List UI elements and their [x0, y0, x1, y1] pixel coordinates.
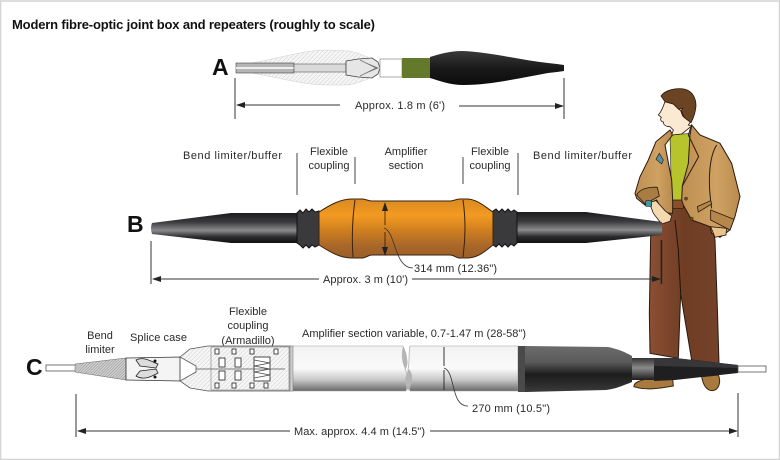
- B section labels: Amplifier: [385, 146, 428, 158]
- man: right cuff: [711, 210, 734, 230]
- man: left cuff: [637, 187, 659, 204]
- C: armadillo flexible coupling: [180, 346, 290, 391]
- B section labels: Bend limiter/buffer: [183, 150, 282, 162]
- C labels: Splice case: [130, 332, 187, 344]
- man: watch: [646, 201, 652, 206]
- B section labels: section: [389, 160, 423, 172]
- A: black bend limiter: [430, 51, 564, 85]
- B section labels: Flexible: [471, 146, 509, 158]
- C: diameter leader: [444, 368, 468, 406]
- C: right fibre: [738, 366, 766, 372]
- man: hair: [661, 89, 696, 123]
- repeater A: [212, 50, 564, 85]
- dimension B text: Approx. 3 m (10'): [323, 274, 408, 286]
- A: inner core: [236, 58, 380, 78]
- C: splice case: [126, 357, 180, 381]
- B section dividers: [297, 153, 518, 195]
- dimension B: [151, 240, 661, 284]
- man: upper body: [635, 89, 740, 237]
- B: diameter leader: [384, 228, 413, 268]
- C labels: Flexible: [229, 306, 267, 318]
- B: diameter text: 314 mm (12.36"): [414, 263, 497, 275]
- C: body collar line: [290, 346, 293, 391]
- B: label: B: [127, 211, 144, 237]
- A: white coupling: [380, 59, 402, 77]
- C: left fibre: [46, 365, 76, 371]
- man: hand in pocket: [711, 227, 727, 237]
- man: lapel and sleeve seams: [682, 125, 717, 208]
- C: diameter text: 270 mm (10.5"): [472, 403, 550, 415]
- dimension C: [76, 393, 738, 437]
- C labels: Bend: [87, 330, 113, 342]
- C: collar: [632, 358, 654, 380]
- man: left jacket panel and sleeve: [635, 130, 673, 213]
- B: left bend limiter: [151, 213, 297, 243]
- A: green section: [402, 58, 430, 78]
- A: hatched cutaway housing: [252, 50, 368, 85]
- repeater C: [46, 346, 766, 406]
- repeater B: [151, 199, 662, 268]
- C: hatched bend limiter cone: [75, 358, 126, 380]
- man: buttons and pocket: [684, 197, 688, 200]
- dimension A text: Approx. 1.8 m (6'): [355, 100, 445, 112]
- B section labels: Bend limiter/buffer: [533, 150, 632, 162]
- figure: man for scale: [634, 89, 740, 391]
- B: diameter arrow: [384, 203, 386, 255]
- man: hand: [649, 201, 672, 224]
- B: right bend limiter: [517, 212, 662, 243]
- B section labels: coupling: [470, 160, 510, 172]
- C labels: Amplifier section variable, 0.7-1.47 m (28-58"): [302, 328, 526, 340]
- B section labels: Flexible: [310, 146, 348, 158]
- C labels: coupling: [228, 320, 268, 332]
- man: badge: [656, 153, 663, 164]
- C: white amplifier section: [290, 346, 407, 391]
- man: right jacket panel and sleeve: [682, 125, 740, 237]
- man: trousers: [649, 200, 719, 363]
- man: shirt: [670, 133, 692, 203]
- C: break shading: [402, 346, 412, 391]
- man: shoes: [634, 375, 720, 391]
- B: orange amplifier body: [319, 199, 493, 258]
- C labels: limiter: [85, 344, 115, 356]
- C labels: (Armadillo): [221, 335, 275, 347]
- title: Modern fibre-optic joint box and repeaters (roughly to scale): [12, 17, 375, 32]
- dimension A: [235, 78, 564, 119]
- B: body seams: [352, 200, 465, 257]
- C labels: [85, 306, 526, 356]
- label: A: A: [212, 54, 229, 80]
- C: diameter line: [443, 347, 445, 390]
- C: label: C: [26, 354, 43, 380]
- C: dark section: [518, 346, 632, 392]
- B section labels: [183, 146, 632, 172]
- B: right corrugated coupling: [493, 209, 517, 247]
- dimension C text: Max. approx. 4.4 m (14.5"): [294, 426, 425, 438]
- C: end cone: [654, 358, 738, 381]
- B section labels: coupling: [309, 160, 349, 172]
- man: neck and face: [658, 102, 692, 135]
- B: left corrugated coupling: [297, 209, 319, 248]
